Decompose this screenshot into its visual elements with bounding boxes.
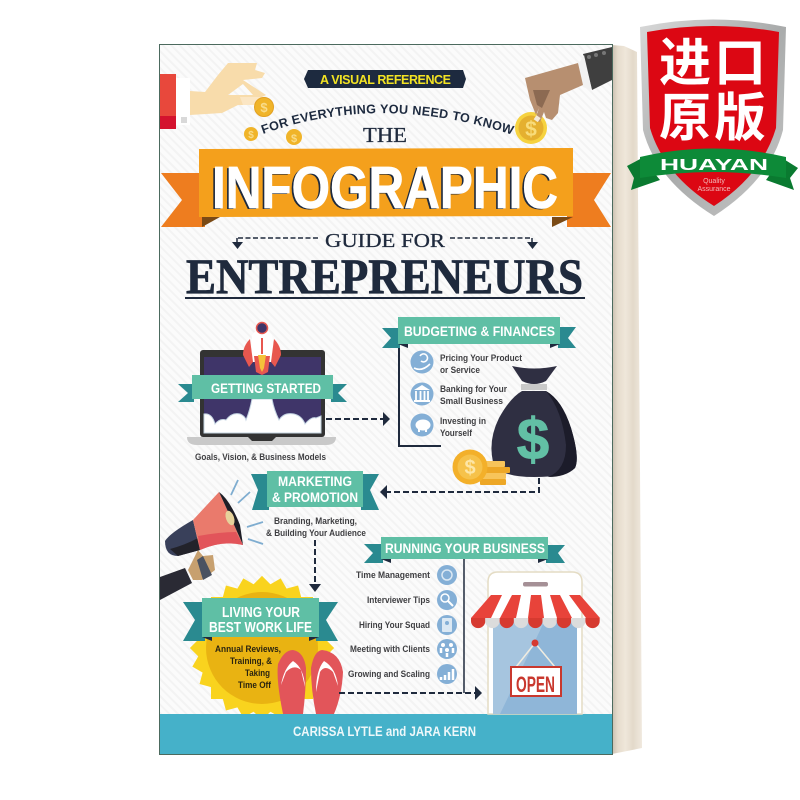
title word INFOGRAPHIC shadow: INFOGRAPHIC [210,156,556,222]
icon: gold coins: $ [464,457,476,479]
caption: work life: Time Off [238,680,272,690]
text: banking: Banking for Your [440,384,507,394]
icon: laptop with rocket [187,322,336,445]
caption: work life: Annual Reviews, [215,644,281,654]
banner: running [364,537,565,563]
badge: imported original shield [627,20,798,216]
icon: banking [410,382,434,406]
banner: work life [183,598,338,641]
illustration: left hand dropping coin: $ [291,133,297,145]
caption: marketing: & Building Your Audience [266,528,366,538]
banner: marketing: & PROMOTION [272,490,358,505]
item: meeting with clients [350,639,457,659]
icon: megaphone with hand [160,480,263,600]
panel: getting started [178,322,347,462]
curved heading: FOR EVERYTHING YOU NEED TO KNOW [261,104,515,134]
banner: budgeting: BUDGETING & FINANCES [404,323,555,339]
banner: budgeting [382,317,576,348]
badge characters: 版 [714,90,766,148]
item: growing and scaling [348,664,457,684]
caption: work life: Taking [245,668,270,678]
badge: A Visual Reference [304,70,466,88]
caption: marketing: Branding, Marketing, [274,516,357,526]
item: growing and scaling: Growing and Scaling [348,669,430,679]
badge: A Visual Reference: A VISUAL REFERENCE [320,73,451,87]
icon: flip flops [278,650,343,714]
title word INFOGRAPHIC: INFOGRAPHIC [212,155,558,221]
text: investing [440,416,486,438]
panel: budgeting and finances [382,317,576,446]
bracket line [399,344,441,446]
caption: work life [215,644,281,690]
caption: marketing [266,516,366,538]
awning [471,595,600,628]
badge characters: 口 [714,35,766,93]
subtitle with arrows: GUIDE FOR [325,230,445,252]
banner: marketing [251,471,379,510]
subtitle with arrows [232,230,538,252]
illustration: left hand dropping coin: $ [260,100,268,115]
open sign [511,640,561,697]
ribbon [627,148,798,190]
arrow: getting started to budgeting [326,412,390,426]
text: banking [440,384,507,406]
panel: running your business [348,537,565,693]
icon: money bag: $ [517,407,549,472]
timeline line [463,559,465,693]
icon: phone storefront [471,572,600,714]
arrow: money to marketing [380,478,539,499]
book page edges [612,45,642,754]
caption: goals: Goals, Vision, & Business Models [195,452,326,462]
item: time management [356,565,457,585]
panel: marketing and promotion [251,471,379,538]
icon: piggy bank [410,414,434,436]
illustration: left hand dropping coin [160,63,302,145]
item: meeting with clients: Meeting with Clients [350,644,430,654]
badge characters [659,35,766,148]
text: pricing [440,353,522,375]
text: investing: Investing in [440,416,486,426]
icon: pricing [410,350,434,374]
caption: work life: Training, & [230,656,272,666]
badge characters: 原 [659,90,711,148]
icon: money bag [491,366,577,477]
illustration: left hand dropping coin: $ [248,130,254,141]
banner: getting started: GETTING STARTED [211,381,321,396]
footer band [160,714,612,754]
text: pricing: Pricing Your Product [440,353,522,363]
arrow: work life to open shop [339,686,482,700]
orange title banner [161,148,611,227]
arrow: marketing to work life [309,540,321,592]
badge characters: 进 [659,35,711,93]
text: banking: Small Business [440,396,503,406]
banner: work life: LIVING YOUR [222,605,300,621]
banner: getting started [178,375,347,402]
title word ENTREPRENEURS: ENTREPRENEURS [186,248,583,304]
item: hiring your squad [359,615,457,635]
quality assurance [697,178,731,193]
ribbon: HUAYAN [660,157,768,174]
title word THE: THE [363,123,407,147]
item: hiring your squad: Hiring Your Squad [359,620,430,630]
illustration: right hand with coin [515,47,612,144]
authors: CARISSA LYTLE and JARA KERN [293,724,476,739]
item: time management: Time Management [356,570,430,580]
quality assurance: Assurance [697,186,731,193]
icon: gold coins [452,450,510,485]
banner: marketing: MARKETING [278,474,352,489]
banner: running: RUNNING YOUR BUSINESS [385,540,545,556]
open sign: OPEN [516,672,555,697]
item: interviewer tips: Interviewer Tips [367,595,430,605]
item: interviewer tips [367,590,457,610]
quality assurance: Quality [703,178,725,185]
text: pricing: or Service [440,365,480,375]
text: investing: Yourself [440,428,473,438]
icon: sun [190,576,334,720]
book cover [160,44,612,754]
panel: living your best work life [183,576,343,720]
banner: work life: BEST WORK LIFE [209,620,312,636]
illustration: right hand with coin: $ [525,118,537,141]
